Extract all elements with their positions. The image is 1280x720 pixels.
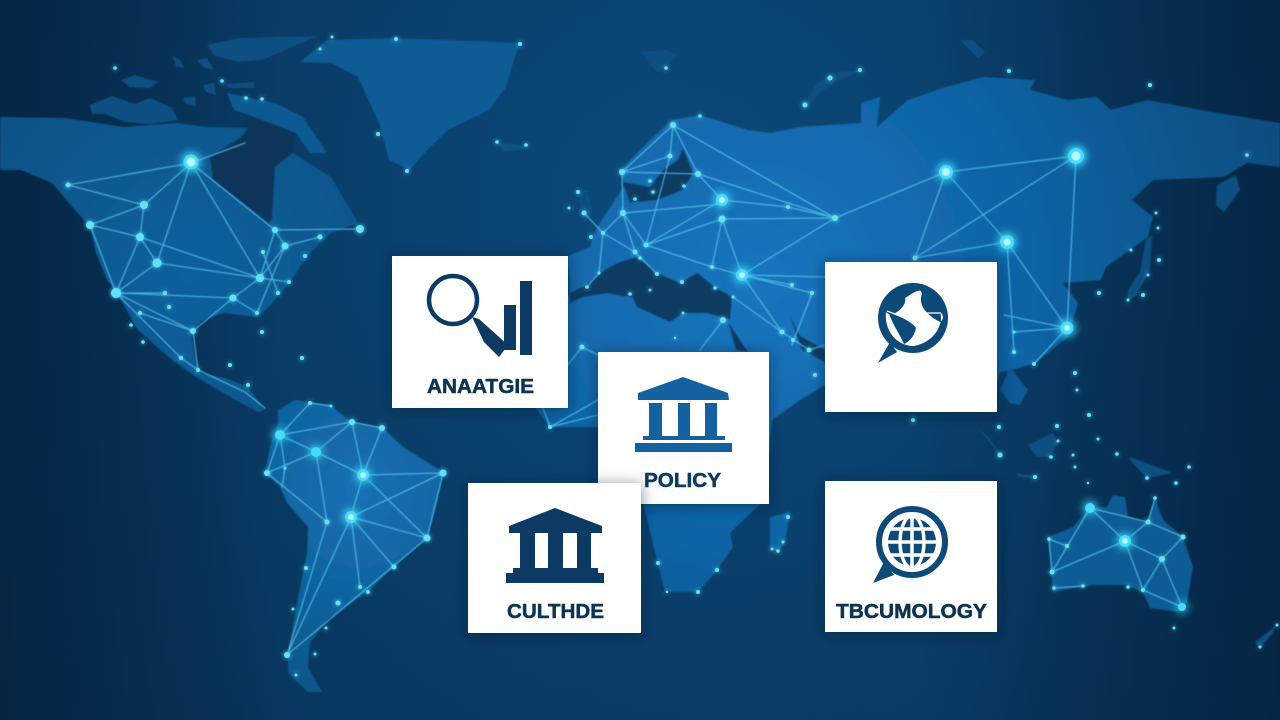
landmass: Baffin region bbox=[227, 93, 327, 153]
icon: policy building bbox=[635, 377, 732, 452]
landmass: Baltic waters bbox=[623, 148, 693, 203]
panel: technology card bbox=[825, 481, 997, 632]
panel: culture card bbox=[468, 483, 641, 633]
landmass: Red Sea and Gulf bbox=[728, 316, 825, 362]
panel: analysis card bbox=[392, 256, 568, 408]
landmass: Australia bbox=[1048, 495, 1193, 612]
icon: globe speech bubble bbox=[878, 283, 948, 363]
landmass: Asian archipelago bbox=[978, 235, 1173, 479]
landmass: Greenland bbox=[300, 38, 520, 170]
landmass: Mediterranean sea bbox=[570, 257, 732, 322]
landmass: North and Central America bbox=[0, 117, 358, 412]
network connection lines bbox=[68, 125, 1183, 655]
landmass: northern islands bbox=[577, 40, 1240, 222]
hub node highlights bbox=[186, 152, 1128, 544]
landmass: Madagascar bbox=[770, 512, 790, 552]
landmass: Sri Lanka bbox=[1000, 367, 1028, 405]
landmass: Iceland bbox=[497, 143, 527, 151]
landmass: Arctic islands bbox=[90, 36, 318, 124]
icon: wire globe speech bubble bbox=[873, 509, 945, 583]
panel: policy card bbox=[598, 352, 769, 504]
landmass: Eurasia and Africa bbox=[520, 77, 1280, 592]
landmass: Hudson Bay darker water bbox=[210, 117, 296, 220]
card label: POLICY bbox=[644, 470, 722, 492]
panel: globe card bbox=[825, 262, 997, 412]
card label: ANAATGIE bbox=[427, 376, 534, 398]
landmass: New Zealand bbox=[1255, 625, 1277, 648]
icon: culture building bbox=[506, 508, 604, 583]
card label: CULTHDE bbox=[507, 601, 604, 623]
card label: TBCUMOLOGY bbox=[836, 601, 988, 623]
landmass: South America bbox=[265, 400, 443, 692]
bright hub nodes bbox=[184, 148, 1186, 611]
icon: magnifier with bars bbox=[429, 276, 532, 357]
